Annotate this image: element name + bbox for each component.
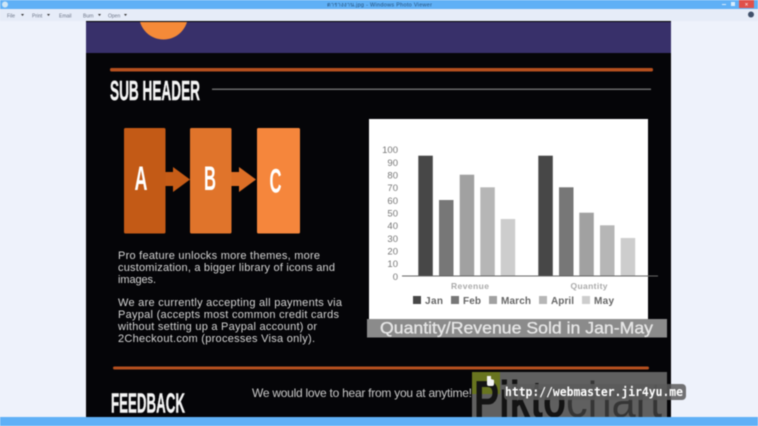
body text: We are currently accepting all payments via (118, 297, 343, 309)
legend: March (501, 296, 531, 307)
infographic dark panel: SUB HEADER (110, 75, 200, 106)
y axis labels: 50 (387, 208, 398, 220)
body text: without setting up a Paypal account) or (117, 321, 317, 333)
category labels: Quantity (570, 281, 608, 291)
legend: Jan (425, 296, 443, 307)
top orange divider (110, 68, 653, 72)
piktochart watermark (471, 371, 668, 418)
y axis labels: 0 (393, 272, 398, 283)
lower orange divider (113, 366, 649, 370)
toolbar (0, 9, 758, 21)
y axis labels: 100 (382, 145, 398, 156)
category labels (451, 281, 608, 291)
legend: April (551, 296, 574, 307)
process diagram A B C (124, 128, 300, 234)
body text: customization, a bigger library of icons and (118, 262, 335, 274)
body text: Pro feature unlocks more themes, more (118, 250, 320, 262)
legend (413, 296, 614, 307)
revenue bars (418, 156, 515, 276)
toolbar: Print (32, 14, 43, 20)
quantity bars (538, 156, 635, 276)
y axis labels: 10 (387, 259, 398, 270)
bottom taskbar (0, 417, 758, 426)
box C (257, 128, 300, 234)
body text: images. (118, 274, 156, 286)
toolbar: Burn (83, 14, 94, 20)
legend: May (594, 296, 614, 307)
box B: B (204, 160, 216, 198)
arrow B to C (231, 167, 256, 192)
y axis labels (382, 145, 398, 283)
purple header band (86, 21, 672, 54)
box A: A (134, 160, 148, 198)
y axis labels: 70 (387, 183, 398, 194)
toolbar: File (7, 14, 15, 20)
box B (190, 128, 232, 234)
infographic dark panel: FEEDBACK (111, 388, 185, 418)
legend: Feb (463, 296, 481, 307)
toolbar: Open (108, 14, 120, 20)
arrow A to B (165, 167, 190, 192)
chart title bar: Quantity/Revenue Sold in Jan-May (380, 320, 654, 338)
y axis labels: 40 (387, 221, 398, 232)
y axis labels: 90 (387, 158, 398, 169)
box C: C (270, 162, 282, 200)
url overlay pill: http://webmaster.jir4yu.me (505, 385, 683, 399)
body text: 2Checkout.com (processes Visa only). (118, 333, 315, 345)
window title bar: × (745, 2, 749, 8)
infographic dark panel (86, 0, 671, 418)
window title bar (0, 0, 758, 9)
box A (124, 128, 166, 234)
feedback text: We would love to hear from you at anytime! (252, 386, 472, 400)
toolbar: Email (59, 14, 72, 20)
y axis labels: 30 (387, 234, 398, 245)
body text (117, 250, 343, 345)
orange circle (140, 21, 188, 40)
window title bar: ตารางงาน.jpg - Windows Photo Viewer (327, 2, 432, 8)
category labels: Revenue (451, 281, 489, 291)
cursor hand icon (487, 376, 494, 386)
body text: Paypal (accepts most common credit cards (118, 309, 340, 321)
y axis labels: 60 (387, 196, 398, 207)
y axis labels: 80 (387, 170, 398, 182)
y axis labels: 20 (387, 246, 398, 258)
bar chart panel (367, 119, 667, 338)
